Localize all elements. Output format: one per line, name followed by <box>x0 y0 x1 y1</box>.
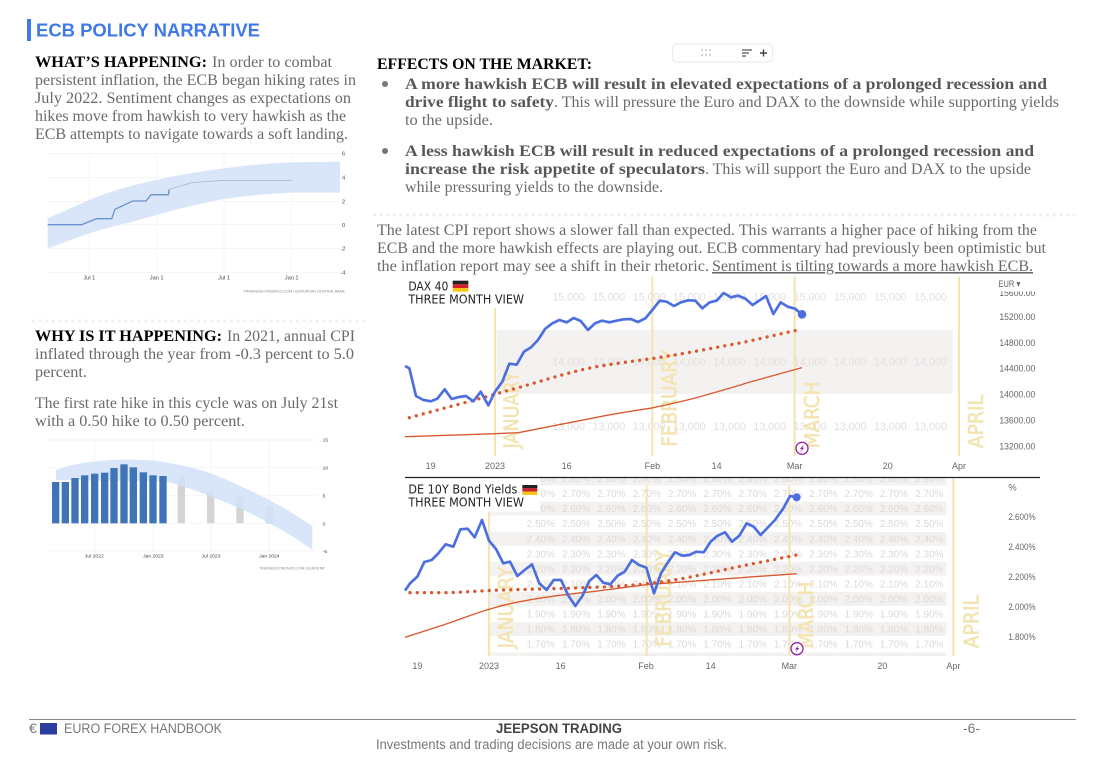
chart: ECB interest rate forecast: Jan 1 <box>285 276 299 282</box>
chart: DAX 40 three month view: 14400.00 <box>999 364 1035 374</box>
chart: DAX 40 three month view: 14800.00 <box>999 338 1035 348</box>
panel: why is it happening text: WHY IS IT HAPPENING: <box>35 328 222 345</box>
chart: DE 10Y bond yields three month view: 1.800% <box>1008 632 1036 642</box>
chart: DE 10Y bond yields three month view: 2.30% 2.30% 2.30% 2.30% 2.30% 2.30% 2.30% 2.30% 2.30% 2.30% 2.30% 2.30% <box>527 549 944 560</box>
icon: event marker <box>796 442 808 454</box>
chart: ECB interest rate forecast: 6 <box>342 152 345 158</box>
chart: euro area inflation forecast: 15 <box>323 438 328 444</box>
panel: effects on the market: while pressuring yields to the downside. <box>405 179 663 196</box>
panel: effects on the market: EFFECTS ON THE MARKET: <box>377 56 592 73</box>
chart: ECB interest rate forecast: Jul 1 <box>218 276 230 282</box>
chart: ECB interest rate forecast: Jul 1 <box>83 276 95 282</box>
chart: DAX 40 three month view: APRIL <box>964 395 988 448</box>
chart: DE 10Y bond yields three month view: 16 <box>556 661 566 671</box>
panel: why is it happening text: with a 0.50 hike to 0.50 percent. <box>35 413 245 430</box>
chart: DE 10Y bond yields three month view: Mar <box>782 661 797 671</box>
text block: latest CPI report: the inflation report may see a shift in their rhetoric. <box>377 258 709 275</box>
panel: what's happening text: WHAT’S HAPPENING: <box>35 54 207 71</box>
chart: euro area inflation forecast: TRADINGECONOMICS.COM | EUROSTAT <box>259 567 326 571</box>
chart: DAX 40 three month view: 14000.00 <box>999 390 1035 400</box>
chart: DE 10Y bond yields three month view: Apr <box>946 661 960 671</box>
chart: DAX 40 three month view: 16 <box>562 461 572 471</box>
panel: what's happening text: hikes move from hawkish to very hawkish as the <box>35 108 346 125</box>
icon: event marker <box>791 643 803 655</box>
panel: effects on the market: to the upside. <box>405 112 493 129</box>
chart: DE 10Y bond yields three month view: 2.200% <box>1008 572 1036 582</box>
chart: ECB interest rate forecast: 2 <box>342 199 345 205</box>
chart: euro area inflation forecast <box>48 438 328 571</box>
panel: why is it happening text: percent. <box>35 364 87 381</box>
chart: euro area inflation forecast: Jul 2022 <box>85 554 104 560</box>
chart: DE 10Y bond yields three month view <box>400 474 1036 671</box>
chart: DE 10Y bond yields three month view: 2023 <box>479 661 499 671</box>
panel: what's happening text <box>35 54 356 143</box>
chart: DE 10Y bond yields three month view: 2.80% 2.80% 2.80% 2.80% 2.80% 2.80% 2.80% 2.80% 2.80% 2.80% 2.80% 2.80% <box>527 474 944 485</box>
chart: DE 10Y bond yields three month view: 19 <box>412 661 422 671</box>
panel: why is it happening text: inflated through the year from -0.3 percent to 5.0 <box>35 346 354 363</box>
panel: what's happening text: July 2022. Sentiment changes as expectations on <box>35 90 351 107</box>
text block: latest CPI report <box>377 222 1047 275</box>
chart: DAX 40 three month view: 2023 <box>485 461 505 471</box>
chart: DAX 40 three month view: Apr <box>952 461 966 471</box>
chart: DE 10Y bond yields three month view: 2.400% <box>1008 542 1036 552</box>
chart: DE 10Y bond yields three month view: 2.00% 2.00% 2.00% 2.00% 2.00% 2.00% 2.00% 2.00% 2.00% 2.00% 2.00% 2.00% <box>527 595 944 606</box>
text block: latest CPI report: The latest CPI report shows a slower fall than expected. This warrants a higher pace of hiking from the <box>377 222 1037 239</box>
panel: effects on the market: increase the risk appetite of speculators <box>405 161 705 178</box>
chart: DE 10Y bond yields three month view: 14 <box>706 661 716 671</box>
chart: DAX 40 three month view: JANUARY <box>500 371 524 450</box>
text block: latest CPI report: ECB and the more hawkish effects are playing out. ECB commentary had previously been optimistic but <box>377 240 1047 257</box>
chart: DAX 40 three month view: 13,000 13,000 13,000 13,000 13,000 13,000 13,000 13,000 13,000 13,000 <box>552 421 947 433</box>
chart: ECB interest rate forecast: 0 <box>342 223 345 229</box>
chart: DAX 40 three month view: Mar <box>787 461 802 471</box>
footer: handbook name: EURO FOREX HANDBOOK <box>64 721 222 736</box>
chart: DAX 40 three month view: 15,000 15,000 15,000 15,000 15,000 15,000 15,000 15,000 15,000 15,000 <box>552 291 947 303</box>
chart: DE 10Y bond yields three month view: 1.80% 1.80% 1.80% 1.80% 1.80% 1.80% 1.80% 1.80% 1.80% 1.80% 1.80% 1.80% <box>527 625 944 636</box>
chart: DE 10Y bond yields three month view: APRIL <box>959 595 983 648</box>
panel: effects on the market: . This will pressure the Euro and DAX to the downside while supporting yields <box>554 94 1059 111</box>
chart title: DE 10Y bond yields: DE 10Y Bond Yields <box>408 482 517 496</box>
chart title: DAX 40: THREE MONTH VIEW <box>407 292 524 306</box>
footer: page number: -6- <box>963 720 980 736</box>
panel: effects on the market: A less hawkish ECB will result in reduced expectations of a prolonged recession and <box>405 143 1034 160</box>
chart: DE 10Y bond yields three month view: 1.60% 1.60% 1.60% 1.60% 1.60% 1.60% 1.60% 1.60% 1.60% 1.60% 1.60% 1.60% <box>527 655 944 666</box>
panel: effects on the market <box>377 56 1059 196</box>
panel: why is it happening text: In 2021, annual CPI <box>227 328 355 345</box>
panel: effects on the market: drive flight to safety <box>405 94 554 111</box>
chart: DE 10Y bond yields three month view: 2.40% 2.40% 2.40% 2.40% 2.40% 2.40% 2.40% 2.40% 2.40% 2.40% 2.40% 2.40% <box>527 535 944 546</box>
footer: handbook name: € <box>29 720 37 736</box>
chart: DAX 40 three month view: MARCH <box>800 382 824 448</box>
panel: what's happening text: persistent inflation, the ECB began hiking rates in <box>35 72 356 89</box>
chart: DE 10Y bond yields three month view: 2.10% 2.10% 2.10% 2.10% 2.10% 2.10% 2.10% 2.10% 2.10% 2.10% 2.10% 2.10% <box>527 580 944 591</box>
chart: ECB interest rate forecast: -4 <box>340 270 345 276</box>
chart: DE 10Y bond yields three month view: MARCH <box>794 582 818 648</box>
chart: DE 10Y bond yields three month view: 2.70% 2.70% 2.70% 2.70% 2.70% 2.70% 2.70% 2.70% 2.70% 2.70% 2.70% 2.70% <box>527 489 944 500</box>
chart: DE 10Y bond yields three month view: 2.50% 2.50% 2.50% 2.50% 2.50% 2.50% 2.50% 2.50% 2.50% 2.50% 2.50% 2.50% <box>527 519 944 530</box>
panel: why is it happening text <box>35 328 355 430</box>
chart title: DE 10Y bond yields: THREE MONTH VIEW <box>407 496 524 510</box>
chart: DAX 40 three month view: 15200.00 <box>999 312 1035 322</box>
chart: DE 10Y bond yields three month view: JANUARY <box>494 566 518 650</box>
chart: DAX 40 three month view: 14,000 14,000 14,000 14,000 14,000 14,000 14,000 14,000 14,000 14,000 <box>552 356 947 368</box>
panel: what's happening text: ECB attempts to navigate towards a soft landing. <box>35 126 348 143</box>
chart: euro area inflation forecast: Jan 2023 <box>143 554 164 560</box>
chart: DAX 40 three month view: EUR ▾ <box>998 279 1021 289</box>
chart: ECB interest rate forecast: Jan 1 <box>150 276 164 282</box>
chart: euro area inflation forecast: 0 <box>323 521 326 527</box>
chart: ECB interest rate forecast: -2 <box>340 247 345 253</box>
panel: effects on the market: A more hawkish ECB will result in elevated expectations of a prolonged recession and <box>405 76 1047 93</box>
panel: effects on the market: . This will support the Euro and DAX to the upside <box>705 161 1031 178</box>
chart: ECB interest rate forecast <box>48 152 346 293</box>
title: ECB POLICY NARRATIVE <box>36 20 260 40</box>
chart: DE 10Y bond yields three month view: Feb <box>638 661 654 671</box>
icon: floating toolbar widget <box>672 44 772 62</box>
chart title: DE 10Y bond yields <box>407 482 537 510</box>
chart: euro area inflation forecast: Jan 2024 <box>259 554 280 560</box>
panel: what's happening text: In order to combat <box>212 54 333 71</box>
chart: DAX 40 three month view <box>405 277 1040 471</box>
chart: DE 10Y bond yields three month view: % <box>1008 483 1017 493</box>
chart: DE 10Y bond yields three month view: 2.000% <box>1008 602 1036 612</box>
chart: DE 10Y bond yields three month view: FEBRUARY <box>652 550 676 647</box>
panel: why is it happening text: The first rate hike in this cycle was on July 21st <box>35 395 339 412</box>
chart: DE 10Y bond yields three month view: 1.70% 1.70% 1.70% 1.70% 1.70% 1.70% 1.70% 1.70% 1.70% 1.70% 1.70% 1.70% <box>527 640 944 651</box>
text block: latest CPI report: Sentiment is tilting towards a more hawkish ECB. <box>712 258 1033 275</box>
footer: disclaimer: Investments and trading decisions are made at your own risk. <box>376 737 727 752</box>
chart: DAX 40 three month view: Feb <box>645 461 660 471</box>
chart: DE 10Y bond yields three month view: 20 <box>877 661 887 671</box>
chart: euro area inflation forecast: Jul 2023 <box>202 554 221 560</box>
chart: DE 10Y bond yields three month view: 2.60% 2.60% 2.60% 2.60% 2.60% 2.60% 2.60% 2.60% 2.60% 2.60% 2.60% 2.60% <box>527 504 944 515</box>
chart: DE 10Y bond yields three month view: 2.600% <box>1008 512 1036 522</box>
chart: euro area inflation forecast: -5 <box>323 549 327 555</box>
chart: DE 10Y bond yields three month view: 1.90% 1.90% 1.90% 1.90% 1.90% 1.90% 1.90% 1.90% 1.90% 1.90% 1.90% 1.90% <box>527 610 944 621</box>
chart: DAX 40 three month view: 13200.00 <box>999 442 1035 452</box>
chart title: DAX 40: DAX 40 <box>408 280 448 294</box>
chart: DAX 40 three month view: 15600.00 <box>999 288 1035 298</box>
chart: euro area inflation forecast: 10 <box>323 466 328 472</box>
chart: DE 10Y bond yields three month view: 2.20% 2.20% 2.20% 2.20% 2.20% 2.20% 2.20% 2.20% 2.20% 2.20% 2.20% 2.20% <box>527 564 944 575</box>
chart: DAX 40 three month view: FEBRUARY <box>657 350 681 447</box>
chart: DAX 40 three month view: 13600.00 <box>999 416 1035 426</box>
chart: euro area inflation forecast: 5 <box>323 493 326 499</box>
chart: ECB interest rate forecast: TRADINGECONOMICS.COM | EUROPEAN CENTRAL BANK <box>243 289 346 293</box>
chart: DAX 40 three month view: 14 <box>712 461 722 471</box>
chart title: DAX 40 <box>407 280 524 306</box>
chart: DAX 40 three month view: 20 <box>883 461 893 471</box>
chart: DAX 40 three month view: 19 <box>426 461 436 471</box>
footer: brand: JEEPSON TRADING <box>496 721 622 736</box>
chart: ECB interest rate forecast: 4 <box>342 176 345 182</box>
